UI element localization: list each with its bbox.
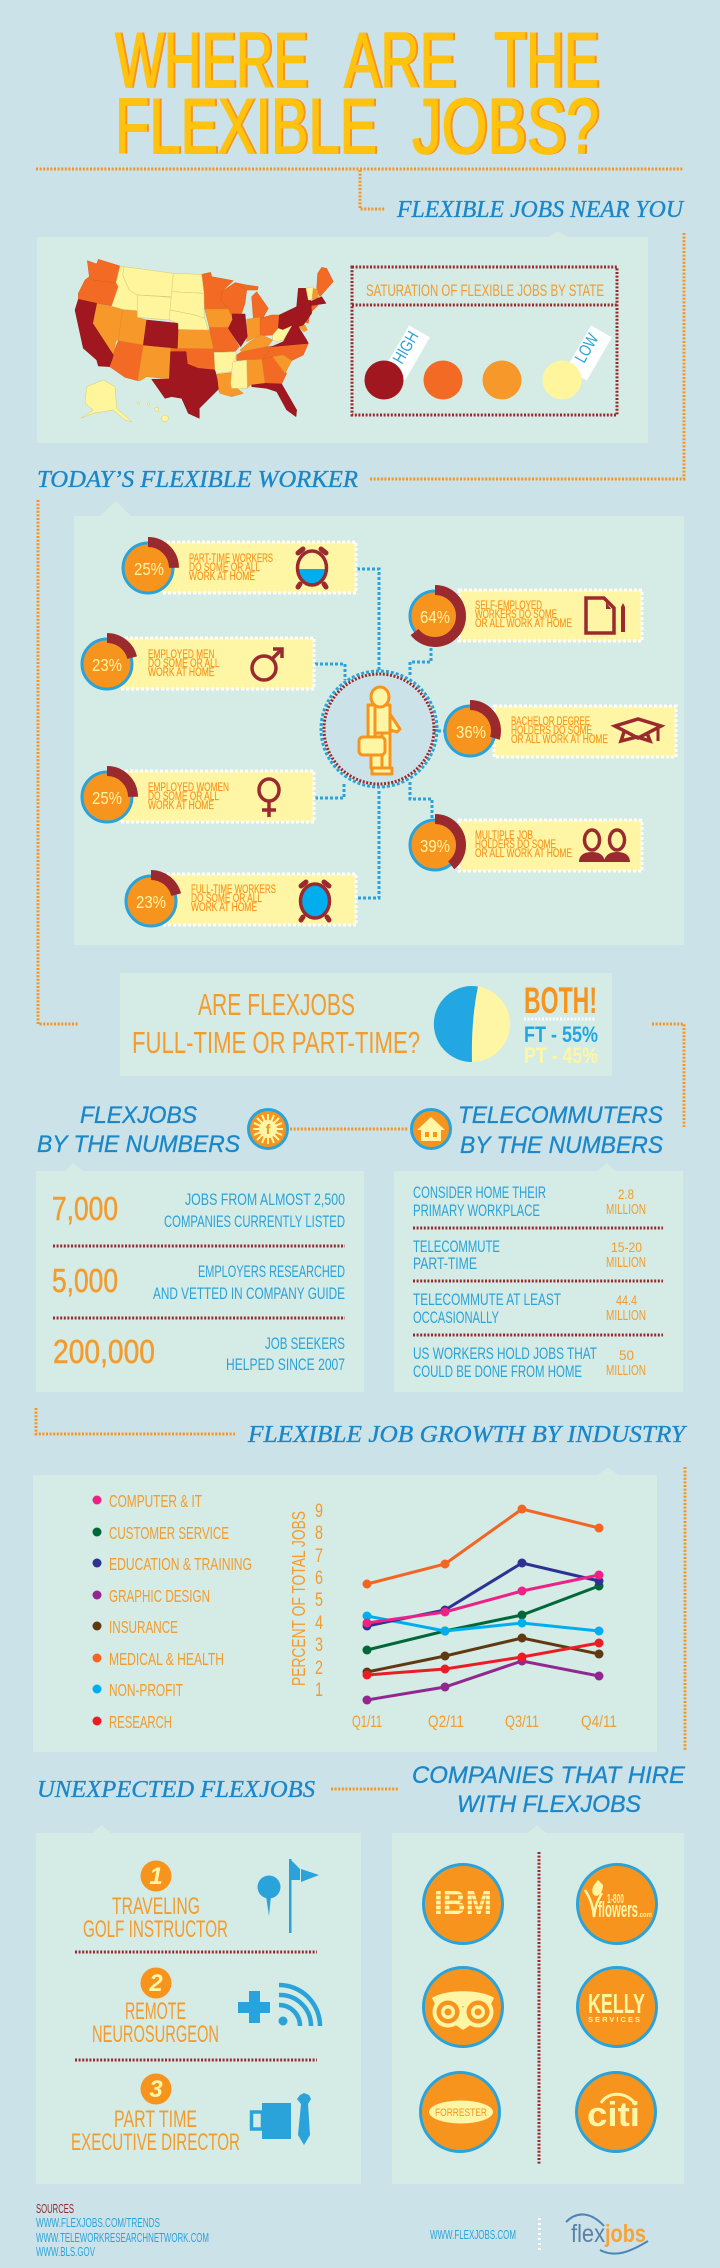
- stat: bachelor degree holders: HOLDERS DO SOME: [511, 725, 592, 737]
- title: ARE: [346, 16, 458, 104]
- job 1: traveling golf instructor: TRAVELING: [112, 1893, 200, 1920]
- line chart: 7: [315, 1546, 323, 1567]
- footer: website: WWW.FLEXJOBS.COM: [430, 2227, 516, 2242]
- stat: could be done from home: [413, 1344, 646, 1381]
- line chart: Q1/11: [352, 1712, 382, 1731]
- stat: employed women: WORK AT HOME: [148, 800, 214, 812]
- stat: part-time telecommute: [413, 1237, 646, 1273]
- title: JOBS?: [412, 82, 599, 170]
- job 1: traveling golf instructor: [83, 1859, 319, 1943]
- stat: part-time telecommute: PART-TIME: [413, 1254, 477, 1273]
- low tag: [566, 325, 612, 381]
- footer: sources: WWW.BLS.GOV: [36, 2244, 95, 2259]
- stat: part-time workers: WORK AT HOME: [189, 571, 255, 583]
- line chart: 8: [315, 1523, 323, 1544]
- line chart: 4: [315, 1613, 323, 1634]
- line chart: Q4/11: [581, 1712, 617, 1731]
- heading: companies that hire with flexjobs: WITH FLEXJOBS: [457, 1791, 641, 1818]
- stat: occasional telecommute: 44.4: [616, 1292, 637, 1308]
- panel: flexjobs numbers: [36, 1163, 364, 1392]
- job 2: remote neurosurgeon: NEUROSURGEON: [92, 2021, 219, 2048]
- stat: employed men: [81, 638, 314, 690]
- heading: flexjobs by the numbers: FLEXJOBS: [80, 1102, 197, 1129]
- stat: part-time telecommute: 15-20: [611, 1239, 642, 1255]
- both result: FT - 55%: [524, 1022, 598, 1047]
- heading: flexible job growth by industry: FLEXIBLE JOB GROWTH BY INDUSTRY: [247, 1422, 688, 1448]
- logo: Forrester: [420, 2072, 500, 2152]
- stat: primary workplace: [413, 1183, 646, 1220]
- stat: self-employed workers: OR ALL WORK AT HOME: [475, 618, 572, 630]
- icon: full alarm clock: [300, 882, 330, 920]
- stat: self-employed workers: [409, 590, 642, 642]
- logo: Citi: [576, 2072, 656, 2152]
- line chart: 1: [315, 1680, 323, 1701]
- logo: Kelly Services: KELLY: [588, 1988, 645, 2019]
- job 2: remote neurosurgeon: [92, 1968, 320, 2048]
- logo: 1-800-flowers: 1-800: [607, 1891, 624, 1906]
- job 2: remote neurosurgeon: REMOTE: [125, 1998, 186, 2025]
- stat: employed women: 25%: [92, 788, 122, 808]
- title: FLEXIBLE: [115, 82, 377, 170]
- stat: primary workplace: CONSIDER HOME THEIR: [413, 1183, 546, 1202]
- stat: full-time workers: FULL-TIME WORKERS: [191, 884, 276, 896]
- title: [115, 16, 601, 170]
- question text: FULL-TIME OR PART-TIME?: [132, 1025, 420, 1060]
- stat: full-time workers: [125, 874, 356, 927]
- line chart: [289, 1501, 617, 1731]
- heading: companies that hire with flexjobs: COMPANIES THAT HIRE: [412, 1762, 686, 1789]
- chart legend: NON-PROFIT: [109, 1680, 183, 1700]
- line chart: 2: [315, 1658, 323, 1679]
- low tag: LOW: [571, 331, 602, 366]
- legend title: SATURATION OF FLEXIBLE JOBS BY STATE: [366, 282, 604, 300]
- stat: employed women: [81, 771, 314, 823]
- job 3: part time executive director: 3: [149, 2076, 163, 2103]
- stat: employed men: EMPLOYED MEN: [148, 649, 214, 661]
- job 3: part time executive director: EXECUTIVE DIRECTOR: [71, 2129, 240, 2156]
- job 1: traveling golf instructor: GOLF INSTRUCTOR: [83, 1916, 228, 1943]
- heading: companies that hire with flexjobs: [412, 1762, 686, 1818]
- stat: could be done from home: 50: [619, 1347, 634, 1363]
- stat: 5,000 employers: AND VETTED IN COMPANY GUIDE: [153, 1284, 345, 1303]
- logo: IBM: IBM: [434, 1884, 492, 1921]
- heading: telecommuters by the numbers: TELECOMMUTERS: [458, 1102, 663, 1129]
- stat: occasional telecommute: TELECOMMUTE AT LEAST: [413, 1290, 561, 1309]
- stat: employed men: 23%: [92, 655, 122, 675]
- title: WHERE: [117, 16, 310, 104]
- job 1: traveling golf instructor: 1: [149, 1863, 163, 1890]
- heading: flexjobs by the numbers: [37, 1102, 240, 1158]
- stat: full-time workers: WORK AT HOME: [191, 902, 257, 914]
- stat: multiple job holders: HOLDERS DO SOME: [475, 839, 556, 851]
- stat: full-time workers: DO SOME OR ALL: [191, 893, 262, 905]
- stat: 200,000 job seekers: 200,000: [53, 1333, 155, 1370]
- stat: self-employed workers: WORKERS DO SOME: [475, 609, 557, 621]
- line chart: Q2/11: [428, 1712, 464, 1731]
- line chart: 5: [315, 1590, 323, 1611]
- icon: graduation cap: [615, 719, 661, 741]
- title: FLEXIBLE: [117, 82, 379, 170]
- chart legend: GRAPHIC DESIGN: [109, 1586, 210, 1606]
- footer: sources: [36, 2201, 209, 2259]
- footer: sources: WWW.FLEXJOBS.COM/TRENDS: [36, 2215, 160, 2230]
- stat: 5,000 employers: EMPLOYERS RESEARCHED: [198, 1262, 345, 1281]
- logo: Kelly Services: [578, 1968, 656, 2046]
- stat: part-time telecommute: MILLION: [606, 1254, 646, 1271]
- chart legend: [92, 1491, 252, 1732]
- heading: telecommuters by the numbers: [458, 1102, 663, 1159]
- title: ARE: [344, 16, 456, 104]
- stat: part-time workers: 25%: [134, 559, 164, 579]
- title: JOBS?: [414, 82, 601, 170]
- panel: companies that hire: [392, 1825, 684, 2184]
- title: THE: [496, 16, 601, 104]
- saturation legend box: [352, 267, 617, 415]
- stat: bachelor degree holders: [444, 705, 676, 757]
- logo: Kelly Services: SERVICES: [588, 2015, 640, 2024]
- line chart: 9: [315, 1501, 323, 1522]
- panel: today's flexible worker: [74, 501, 684, 945]
- icon: half-filled alarm clock: [298, 549, 326, 587]
- footer: sources: WWW.TELEWORKRESEARCHNETWORK.COM: [36, 2230, 209, 2245]
- logo: 1-800-flowers: .com: [638, 1912, 652, 1919]
- stat: 200,000 job seekers: JOB SEEKERS: [265, 1334, 345, 1353]
- panel: telecommuter numbers: [394, 1163, 683, 1392]
- question text: ARE FLEXJOBS: [198, 987, 355, 1022]
- stat: multiple job holders: [409, 819, 642, 871]
- stat: 7,000 jobs: 7,000: [52, 1190, 118, 1227]
- logo: 1-800-flowers: flowers: [598, 1897, 638, 1922]
- stat: 7,000 jobs: JOBS FROM ALMOST 2,500: [185, 1190, 345, 1209]
- chart legend: EDUCATION & TRAINING: [109, 1554, 252, 1574]
- stat: occasional telecommute: OCCASIONALLY: [413, 1308, 499, 1327]
- job 3: part time executive director: [71, 2074, 311, 2156]
- panel: job growth by industry: [33, 1467, 657, 1752]
- footer: sources: SOURCES: [36, 2201, 74, 2216]
- chart legend: MEDICAL & HEALTH: [109, 1649, 224, 1669]
- stat: 5,000 employers: [52, 1262, 345, 1303]
- icon: medical cross and signal: [238, 1985, 320, 2026]
- stat: bachelor degree holders: BACHELOR DEGREE: [511, 716, 590, 728]
- chart legend: CUSTOMER SERVICE: [109, 1523, 229, 1543]
- stat: employed women: EMPLOYED WOMEN: [148, 782, 229, 794]
- stat: primary workplace: MILLION: [606, 1201, 646, 1218]
- stat: part-time workers: DO SOME OR ALL: [189, 562, 260, 574]
- heading: unexpected flexjobs: UNEXPECTED FLEXJOBS: [37, 1777, 315, 1803]
- stat: part-time telecommute: TELECOMMUTE: [413, 1237, 500, 1256]
- icon: male symbol: [252, 649, 282, 680]
- icon: golf tee and flags: [258, 1859, 319, 1933]
- panel: unexpected flexjobs: [36, 1825, 361, 2184]
- stat: could be done from home: COULD BE DONE FROM HOME: [413, 1362, 582, 1381]
- icon: house: [412, 1110, 450, 1148]
- both result: PT - 45%: [524, 1043, 598, 1068]
- title: WHERE: [115, 16, 308, 104]
- stat: employed men: WORK AT HOME: [148, 667, 215, 679]
- heading: flexible jobs near you: FLEXIBLE JOBS NEAR YOU: [396, 197, 685, 223]
- stat: part-time workers: [122, 542, 356, 594]
- icon: document and pencil: [586, 598, 625, 633]
- logo: Citi: citi: [587, 2096, 640, 2134]
- central worker figure: [321, 671, 437, 787]
- stat: primary workplace: 2.8: [618, 1186, 634, 1202]
- heading: flexjobs by the numbers: BY THE NUMBERS: [37, 1131, 240, 1158]
- stat: 7,000 jobs: [52, 1190, 345, 1231]
- question text: [132, 987, 420, 1060]
- heading: today's flexible worker: TODAY’S FLEXIBLE WORKER: [37, 467, 358, 493]
- logo: flexjobs: jobs: [604, 2220, 646, 2248]
- chart legend: COMPUTER & IT: [109, 1491, 202, 1511]
- icon: mug and tie: [252, 2093, 311, 2145]
- map of US states: [75, 259, 333, 422]
- logo: TripAdvisor owl: [424, 1968, 502, 2046]
- icon: flexjobs sun: [248, 1110, 288, 1148]
- stat: multiple job holders: 39%: [420, 836, 450, 856]
- icon: flexjobs sun: f: [266, 1121, 271, 1137]
- job 3: part time executive director: PART TIME: [114, 2106, 197, 2133]
- high tag: [384, 325, 430, 381]
- connectors: [315, 569, 444, 898]
- chart legend: INSURANCE: [109, 1617, 178, 1637]
- chart legend: RESEARCH: [109, 1712, 172, 1732]
- title: THE: [494, 16, 599, 104]
- stat: bachelor degree holders: 36%: [456, 722, 486, 742]
- stat: self-employed workers: SELF-EMPLOYED: [475, 600, 542, 612]
- stat: employed women: DO SOME OR ALL: [148, 791, 219, 803]
- stat: occasional telecommute: MILLION: [606, 1307, 646, 1324]
- line chart: 3: [315, 1635, 323, 1656]
- legend swatches: [364, 360, 582, 400]
- line chart: Q3/11: [505, 1712, 539, 1731]
- both result: [524, 980, 598, 1068]
- stat: bachelor degree holders: OR ALL WORK AT HOME: [511, 734, 608, 746]
- high tag: HIGH: [389, 328, 422, 367]
- stat: part-time workers: PART-TIME WORKERS: [189, 553, 273, 565]
- stat: could be done from home: US WORKERS HOLD JOBS THAT: [413, 1344, 597, 1363]
- heading: telecommuters by the numbers: BY THE NUMBERS: [460, 1132, 663, 1159]
- logo: IBM: [424, 1864, 502, 1944]
- panel: full-time or part-time: [120, 973, 612, 1076]
- stat: occasional telecommute: [413, 1290, 646, 1327]
- icon: two people: [579, 830, 630, 862]
- stat: 7,000 jobs: COMPANIES CURRENTLY LISTED: [164, 1212, 345, 1231]
- logo: 1-800-flowers: [578, 1864, 656, 1944]
- line chart: 6: [315, 1568, 323, 1589]
- stat: self-employed workers: 64%: [420, 607, 450, 627]
- logo: Forrester: FORRESTER: [435, 2107, 487, 2119]
- stat: employed men: DO SOME OR ALL: [148, 658, 220, 670]
- stat: primary workplace: PRIMARY WORKPLACE: [413, 1201, 540, 1220]
- stat: 200,000 job seekers: HELPED SINCE 2007: [226, 1355, 345, 1374]
- pie chart: [434, 986, 510, 1062]
- stat: full-time workers: 23%: [136, 892, 166, 912]
- line chart: PERCENT OF TOTAL JOBS: [289, 1511, 309, 1686]
- stat: 200,000 job seekers: [53, 1333, 345, 1374]
- logo: flexjobs: flex: [571, 2220, 605, 2248]
- stat: multiple job holders: OR ALL WORK AT HOME: [475, 848, 572, 860]
- logo: flexjobs: [566, 2214, 648, 2254]
- stat: could be done from home: MILLION: [606, 1362, 646, 1379]
- both result: BOTH!: [524, 980, 597, 1021]
- stat: multiple job holders: MULTIPLE JOB: [475, 830, 533, 842]
- stat: 5,000 employers: 5,000: [52, 1262, 118, 1299]
- icon: female symbol: [259, 779, 279, 817]
- job 2: remote neurosurgeon: 2: [148, 1970, 163, 1997]
